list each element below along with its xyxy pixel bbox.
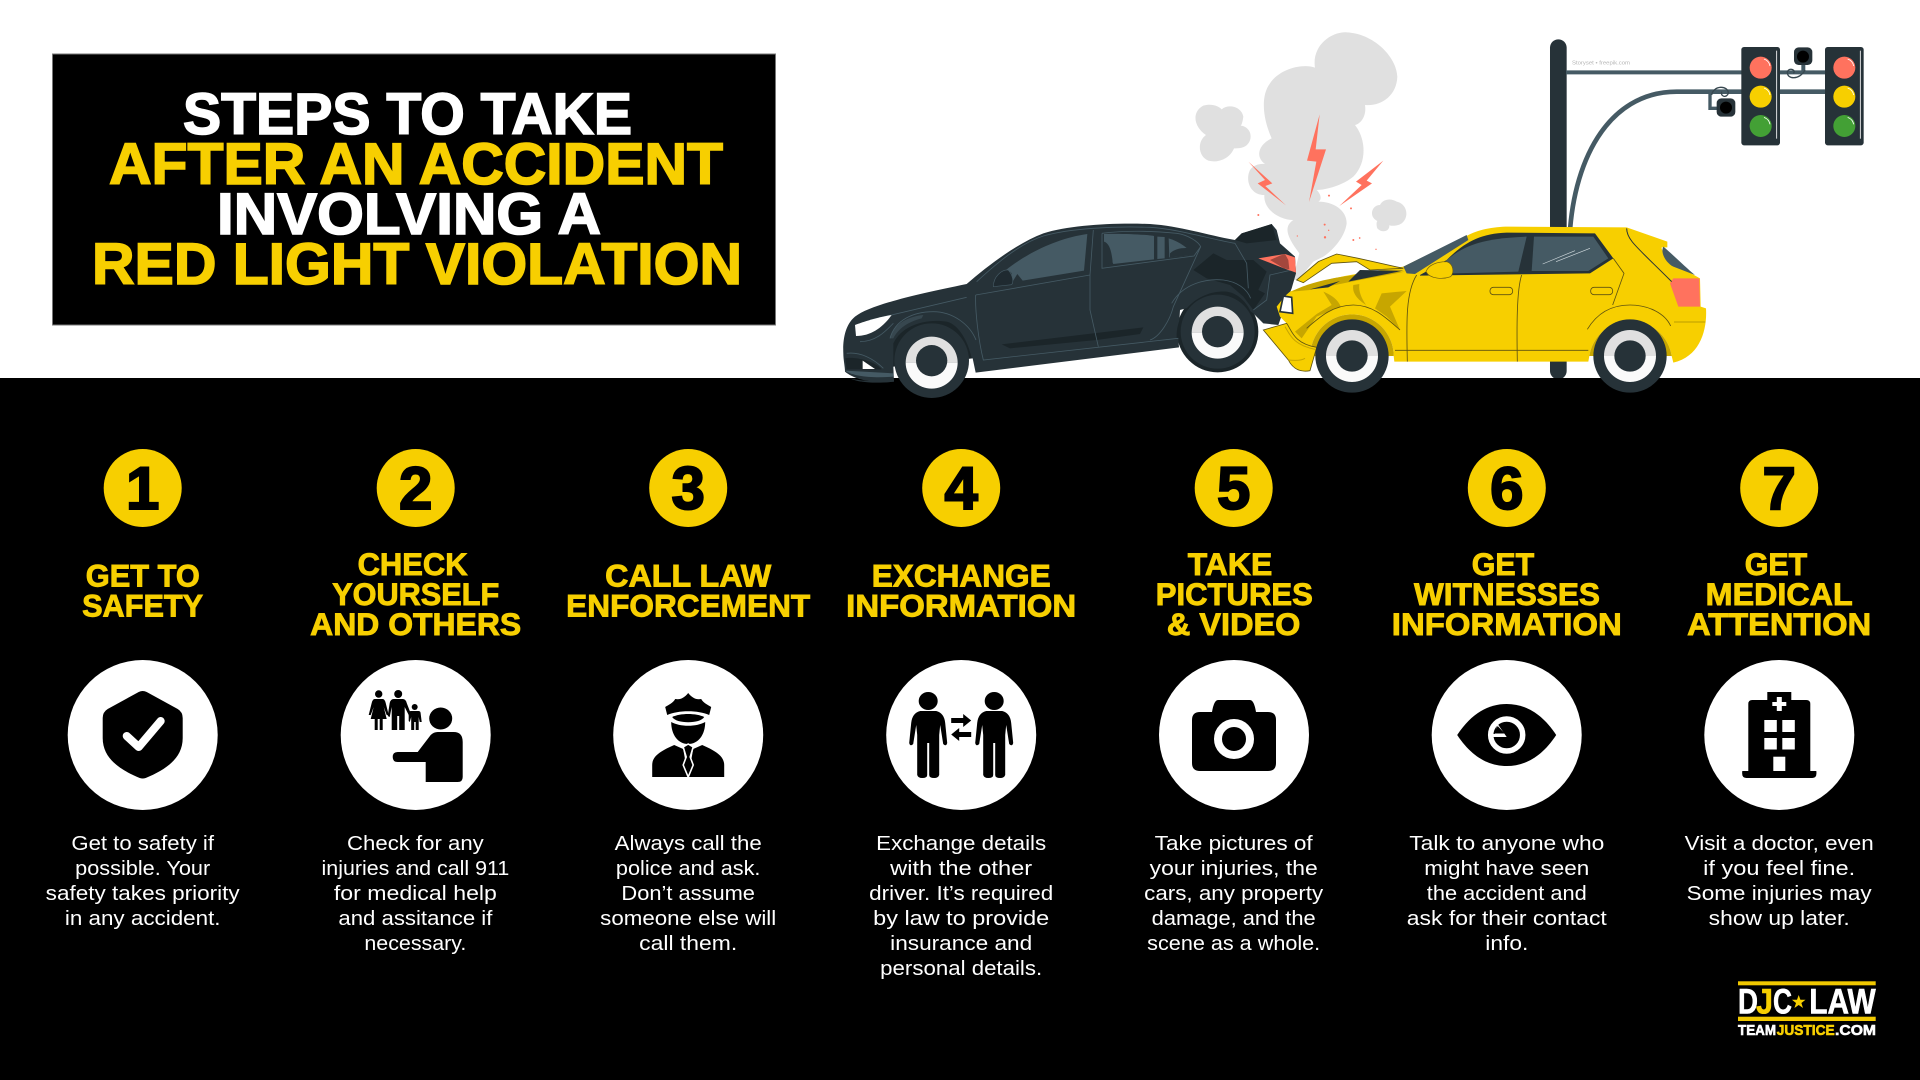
description 4: driver. It’s required	[869, 883, 1053, 905]
description 3: someone else will	[600, 908, 776, 930]
number badge 5	[1195, 449, 1273, 527]
icon: eye	[1432, 660, 1582, 810]
logo: DJC Law: D	[1738, 982, 1758, 1021]
heading 3	[566, 558, 810, 624]
smoke cloud and impact bolts	[1195, 32, 1406, 280]
heading 4: INFORMATION	[846, 588, 1076, 624]
logo: DJC Law: J	[1756, 982, 1773, 1021]
heading 1: SAFETY	[82, 588, 203, 624]
heading 5: TAKE	[1188, 546, 1272, 582]
description 3: Always call the	[615, 833, 762, 855]
description 1: safety takes priority	[46, 883, 241, 905]
description 2: for medical help	[334, 883, 497, 905]
icon: police officer	[613, 660, 763, 810]
icon: person checking on family	[341, 660, 491, 810]
step 5: take pictures and video	[1144, 449, 1324, 955]
black lower background	[0, 378, 1920, 1080]
description 7: if you feel fine.	[1703, 858, 1855, 880]
heading 4: EXCHANGE	[872, 558, 1051, 594]
step 4: exchange information	[846, 449, 1076, 980]
description 5: cars, any property	[1144, 883, 1324, 905]
description 3: Don’t assume	[621, 883, 755, 905]
heading 6: WITNESSES	[1414, 576, 1600, 612]
logo: DJC Law: TEAM	[1738, 1023, 1776, 1039]
description 1: in any accident.	[65, 908, 221, 930]
logo: DJC Law: .COM	[1835, 1023, 1876, 1039]
icon: camera	[1159, 660, 1309, 810]
title box: AFTER AN ACCIDENT	[109, 132, 723, 197]
number badge 2	[377, 449, 455, 527]
heading 4	[846, 558, 1076, 624]
title box: RED LIGHT VIOLATION	[92, 232, 742, 297]
description 1: Get to safety if	[71, 833, 214, 855]
traffic light pole and signals: Storyset • freepik.com	[1572, 61, 1630, 67]
step 1: get to safety	[46, 449, 241, 930]
number badge 1: 1	[126, 455, 159, 522]
number badge 6: 6	[1490, 455, 1523, 522]
description 6: the accident and	[1427, 883, 1587, 905]
description 5: damage, and the	[1152, 908, 1316, 930]
title box: INVOLVING A	[217, 182, 601, 247]
step 6: get witnesses information	[1392, 449, 1622, 955]
description 2	[322, 833, 509, 955]
description 7: Some injuries may	[1687, 883, 1873, 905]
number badge 4	[922, 449, 1000, 527]
number badge 6	[1468, 449, 1546, 527]
logo: DJC Law: LAW	[1809, 982, 1876, 1021]
description 6: ask for their contact	[1407, 908, 1607, 930]
description 6	[1407, 833, 1607, 955]
title box	[52, 54, 776, 325]
heading 7: GET	[1745, 546, 1807, 582]
heading 3: ENFORCEMENT	[566, 588, 810, 624]
icon: shield with check	[68, 660, 218, 810]
heading 7	[1687, 546, 1871, 642]
description 2: necessary.	[364, 933, 466, 955]
description 4: by law to provide	[873, 908, 1049, 930]
heading 1: GET TO	[86, 558, 200, 594]
description 3: call them.	[639, 933, 737, 955]
icon: two people exchanging	[886, 660, 1036, 810]
heading 5: & VIDEO	[1167, 606, 1300, 642]
traffic light pole and signals	[1550, 39, 1864, 379]
number badge 3	[649, 449, 727, 527]
number badge 7	[1740, 449, 1818, 527]
description 3	[600, 833, 776, 955]
title box: STEPS TO TAKE	[183, 82, 632, 147]
black car	[843, 224, 1296, 398]
description 1: possible. Your	[75, 858, 210, 880]
description 2: injuries and call 911	[322, 858, 509, 880]
description 7: Visit a doctor, even	[1685, 833, 1874, 855]
description 1	[46, 833, 241, 930]
description 6: Talk to anyone who	[1409, 833, 1604, 855]
heading 2: CHECK	[358, 546, 468, 582]
logo: DJC Law: C	[1773, 982, 1792, 1021]
number badge 1	[104, 449, 182, 527]
step 7: get medical attention	[1685, 449, 1874, 930]
description 4	[869, 833, 1053, 980]
logo: DJC Law	[1738, 981, 1876, 1039]
number badge 3: 3	[672, 455, 705, 522]
description 7: show up later.	[1709, 908, 1850, 930]
description 2: Check for any	[347, 833, 485, 855]
description 6: might have seen	[1424, 858, 1589, 880]
number badge 2: 2	[399, 455, 432, 522]
yellow car	[1263, 227, 1706, 393]
heading 1	[82, 558, 203, 624]
step 3: call law enforcement	[566, 449, 810, 955]
logo: DJC Law: JUSTICE	[1777, 1023, 1835, 1039]
description 2: and assitance if	[338, 908, 493, 930]
heading 6: INFORMATION	[1392, 606, 1622, 642]
heading 2: YOURSELF	[332, 576, 499, 612]
description 4: with the other	[889, 858, 1032, 880]
heading 7: ATTENTION	[1687, 606, 1871, 642]
heading 2	[310, 546, 521, 642]
description 4: Exchange details	[876, 833, 1046, 855]
description 5: your injuries, the	[1150, 858, 1318, 880]
heading 6: GET	[1472, 546, 1534, 582]
description 7	[1685, 833, 1874, 930]
heading 7: MEDICAL	[1706, 576, 1853, 612]
heading 5	[1156, 546, 1313, 642]
heading 6	[1392, 546, 1622, 642]
description 4: insurance and	[890, 933, 1032, 955]
description 4: personal details.	[880, 958, 1042, 980]
heading 5: PICTURES	[1156, 576, 1313, 612]
heading 2: AND OTHERS	[310, 606, 521, 642]
number badge 7: 7	[1763, 455, 1796, 522]
step 2: check yourself and others	[310, 449, 521, 955]
description 5: scene as a whole.	[1147, 933, 1320, 955]
heading 3: CALL LAW	[605, 558, 771, 594]
description 3: police and ask.	[616, 858, 760, 880]
number badge 5: 5	[1217, 455, 1250, 522]
icon: hospital building	[1704, 660, 1854, 810]
description 5	[1144, 833, 1324, 955]
description 6: info.	[1485, 933, 1528, 955]
description 5: Take pictures of	[1155, 833, 1313, 855]
number badge 4: 4	[945, 455, 979, 522]
